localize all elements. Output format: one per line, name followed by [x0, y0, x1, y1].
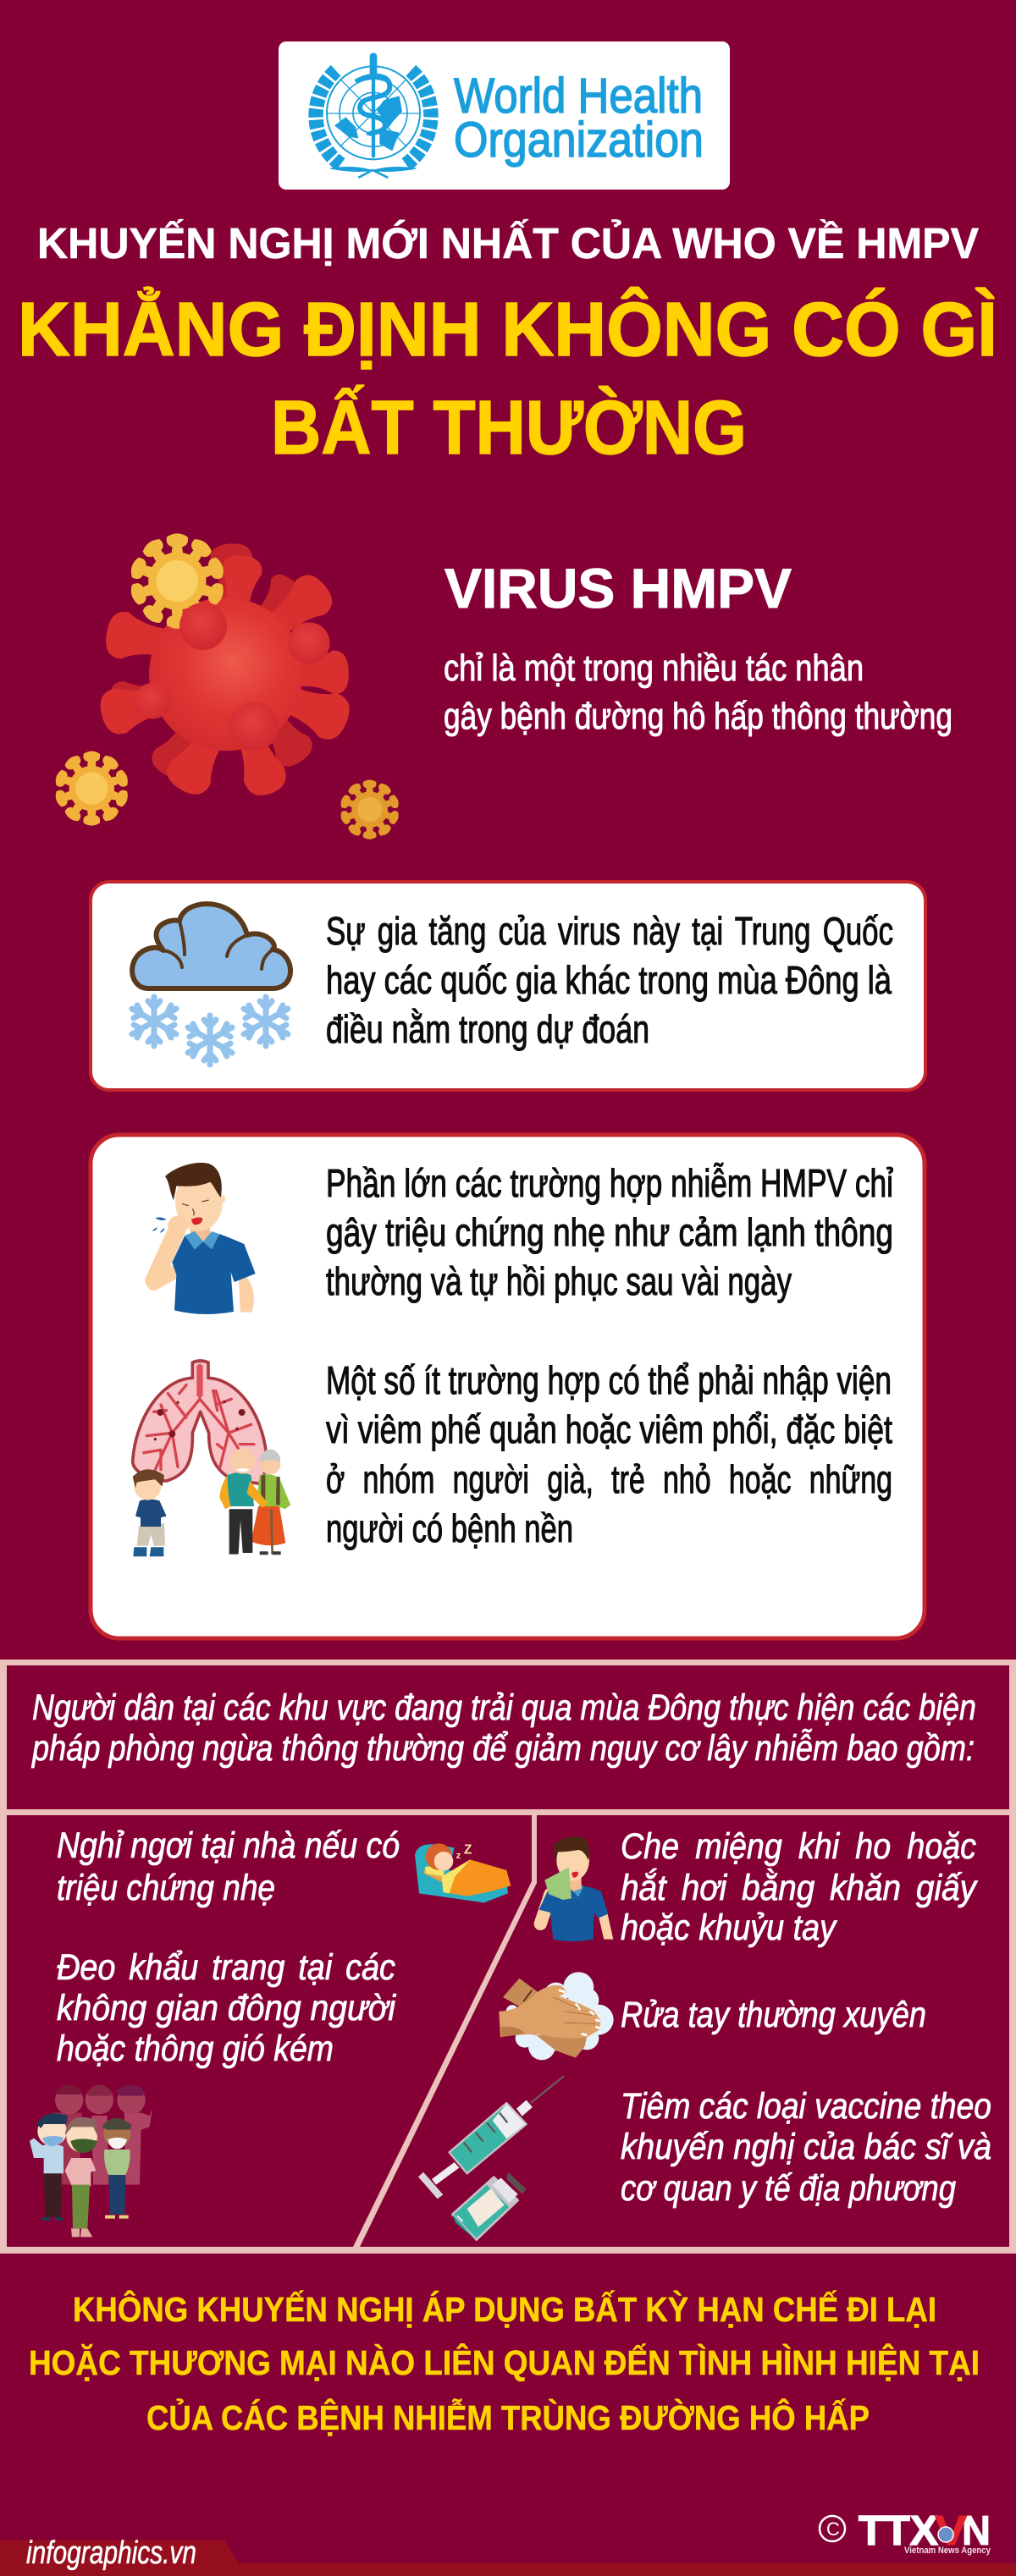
- text: vaccination: [621, 2086, 991, 2209]
- text: virus description: chỉ là một trong nhiều tác nhân: [444, 647, 864, 689]
- logo text: World Health: World Health: [454, 69, 703, 124]
- figure: elderly man: [219, 1449, 268, 1555]
- text: cover mouth: [621, 1826, 978, 1948]
- text: prevention intro: [30, 1687, 976, 1769]
- small virus: left: [53, 751, 130, 826]
- text: wear masks: Đeo khẩu trang tại các: [57, 1947, 395, 1988]
- small virus: right: [340, 779, 400, 839]
- icon: syringe: [418, 2076, 564, 2199]
- icon: coughing man: [152, 1163, 256, 1314]
- icon: red virus with yellow viruses: [53, 533, 400, 839]
- title line 3: BẤT THƯỜNG: [271, 384, 747, 471]
- logo: TTXVN: V: [935, 2508, 967, 2554]
- text: snore: z: [456, 1851, 461, 1861]
- text: wear masks: hoặc thông gió kém: [57, 2028, 334, 2069]
- title: [18, 218, 997, 471]
- title line 1: KHUYẾN NGHỊ MỚI NHẤT CỦA WHO VỀ HMPV: [37, 218, 979, 267]
- text: rest at home: triệu chứng nhẹ: [57, 1868, 275, 1908]
- icon: lungs with child and elderly couple: [133, 1361, 290, 1556]
- text: mild symptoms: thường và tự hồi phục sau vài ngày: [326, 1259, 792, 1303]
- text: rest at home: Nghỉ ngơi tại nhà nếu có: [57, 1825, 400, 1866]
- logo text: Organization: Organization: [454, 113, 704, 168]
- text: closing statement: CỦA CÁC BỆNH NHIỄM TRÙNG ĐƯỜNG HÔ HẤP: [146, 2398, 870, 2437]
- text: severe cases: người có bệnh nền: [326, 1506, 573, 1550]
- icon: WHO emblem: [316, 57, 431, 178]
- small virus: top: [129, 533, 226, 629]
- text: wear masks: không gian đông người: [57, 1988, 396, 2028]
- title line 2: KHẲNG ĐỊNH KHÔNG CÓ GÌ: [18, 286, 997, 372]
- footer bar: [0, 2540, 1016, 2576]
- icon: masked crowd: [30, 2084, 152, 2237]
- icon: child sleeping in bed: Z: [464, 1843, 472, 1858]
- footer: site name: infographics.vn: [26, 2535, 196, 2571]
- text: winter forecast: điều nằm trong dự đoán: [326, 1007, 649, 1051]
- heading: VIRUS HMPV: VIRUS HMPV: [444, 557, 792, 619]
- logo: TTXVN: C: [826, 2518, 840, 2540]
- logo: TTXVN: TTX: [859, 2508, 938, 2554]
- text: wash hands: Rửa tay thường xuyên: [621, 1995, 926, 2035]
- text: cover mouth: Che miệng khi ho hoặc: [621, 1826, 976, 1867]
- text: cover mouth: hắt hơi bằng khăn giấy: [621, 1868, 978, 1908]
- panel: WHO logo: [279, 41, 730, 190]
- panel: symptoms: [91, 1135, 925, 1638]
- text: winter forecast: [326, 909, 893, 1051]
- logo: TTXVN: N: [962, 2508, 991, 2554]
- text: severe cases: [326, 1358, 892, 1550]
- figure: child: [133, 1469, 167, 1556]
- logo: TTXVN: Vietnam News Agency: [904, 2546, 991, 2556]
- text: virus description: [444, 647, 952, 737]
- text: mild symptoms: gây triệu chứng nhẹ như cảm lạnh thông: [326, 1210, 893, 1254]
- icon: vaccine vial: [452, 2172, 527, 2240]
- logo: TTXVN: [820, 2508, 991, 2556]
- text: mild symptoms: [326, 1161, 893, 1303]
- text: wear masks: [57, 1947, 396, 2069]
- text: vaccination: cơ quan y tế địa phương: [621, 2168, 956, 2209]
- panel: prevention frame: [0, 1660, 1016, 2254]
- icon: child sleeping in bed: [415, 1843, 511, 1902]
- icon: man with tissue: [539, 1836, 613, 1941]
- panel: winter forecast: [91, 882, 925, 1090]
- text: cover mouth: hoặc khuỷu tay: [621, 1907, 837, 1948]
- text: closing statement: [29, 2290, 980, 2437]
- text: rest at home: [57, 1825, 400, 1908]
- text: closing statement: KHÔNG KHUYẾN NGHỊ ÁP DỤNG BẤT KỲ HẠN CHẾ ĐI LẠI: [73, 2290, 936, 2329]
- figure: elderly woman: [251, 1450, 290, 1555]
- icon: snow cloud: [132, 904, 290, 1065]
- icon: washing hands with foam: [499, 1972, 614, 2060]
